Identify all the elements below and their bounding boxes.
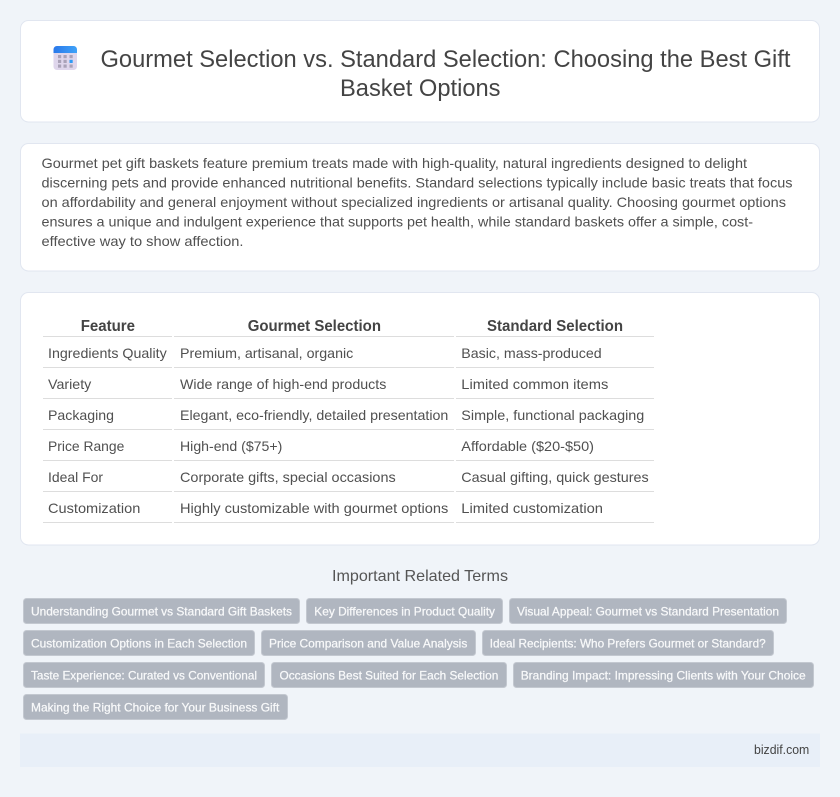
- table row: variety: Variety: [48, 376, 91, 392]
- table row: price range: Price Range: [48, 438, 125, 454]
- tag: ideal recipients: Ideal Recipients: Who Prefers Gourmet or Standard?: [490, 636, 766, 650]
- tag: key differences: [306, 598, 502, 624]
- tag: branding impact: [514, 662, 814, 688]
- table row: ideal for: Casual gifting, quick gestures: [461, 469, 649, 485]
- icon: calendar: [54, 46, 77, 70]
- table row: packaging: Elegant, eco-friendly, detailed presentation: [180, 407, 448, 423]
- table header row: [43, 318, 654, 337]
- table row: customization: Limited customization: [461, 500, 603, 516]
- table header row: Feature: [81, 318, 135, 335]
- table header row: Standard Selection: [487, 318, 623, 335]
- table row: price range: Affordable ($20-$50): [461, 438, 594, 454]
- tag: price comparison: [262, 630, 476, 656]
- table row: price range: [43, 438, 654, 461]
- text block: description: Gourmet pet gift baskets feature premium treats made with high-quality, natural ingredients designed to delight: [42, 155, 747, 171]
- table row: price range: High-end ($75+): [180, 438, 282, 454]
- table row: packaging: Packaging: [48, 407, 114, 423]
- tag: customization options: [24, 630, 254, 656]
- table row: customization: Highly customizable with gourmet options: [180, 500, 448, 516]
- tag: customization options: Customization Options in Each Selection: [31, 636, 247, 650]
- tag: key differences: Key Differences in Product Quality: [314, 604, 495, 618]
- table row: customization: [43, 500, 654, 523]
- table row: packaging: Simple, functional packaging: [461, 407, 644, 423]
- title: [100, 46, 791, 102]
- table row: ingredients quality: Basic, mass-produced: [461, 345, 602, 361]
- tag: visual appeal: Visual Appeal: Gourmet vs Standard Presentation: [517, 604, 779, 618]
- table row: ingredients quality: Premium, artisanal, organic: [180, 345, 353, 361]
- tag: making the right choice: Making the Right Choice for Your Business Gift: [31, 700, 280, 714]
- table header row: Gourmet Selection: [248, 318, 381, 335]
- tag: understanding: Understanding Gourmet vs Standard Gift Baskets: [31, 604, 292, 618]
- tag: occasions: [272, 662, 506, 688]
- table row: ingredients quality: [43, 345, 654, 368]
- table row: packaging: [43, 407, 654, 430]
- panel: description: [20, 144, 820, 271]
- table row: ideal for: [43, 469, 654, 492]
- tag: branding impact: Branding Impact: Impressing Clients with Your Choice: [521, 668, 806, 682]
- text block: description: effective way to show affection.: [42, 233, 244, 249]
- text block: description: on affordability and general enjoyment without specialized ingredients or artisanal quality. Choosing gourmet options: [42, 194, 786, 210]
- tag: price comparison: Price Comparison and Value Analysis: [269, 636, 467, 650]
- panel: comparison table: [20, 292, 820, 545]
- title: Gourmet Selection vs. Standard Selection: Choosing the Best Gift: [100, 46, 791, 73]
- panel: header: [20, 20, 820, 122]
- tag: taste experience: Taste Experience: Curated vs Conventional: [31, 668, 257, 682]
- table row: customization: Customization: [48, 500, 140, 516]
- table row: variety: Limited common items: [461, 376, 608, 392]
- table row: ideal for: Ideal For: [48, 469, 103, 485]
- tag: occasions: Occasions Best Suited for Each Selection: [280, 668, 498, 682]
- footer source text: bizdif.com: [754, 742, 809, 757]
- tag: ideal recipients: [482, 630, 774, 656]
- footer bar: [20, 734, 820, 767]
- table row: variety: [43, 376, 654, 399]
- text block: description: discerning pets and provide enhanced nutritional benefits. Standard selections typically include basic treats that focus: [42, 174, 792, 190]
- table row: ideal for: Corporate gifts, special occasions: [180, 469, 396, 485]
- tag: taste experience: [24, 662, 264, 688]
- table row: variety: Wide range of high-end products: [180, 376, 386, 392]
- tag: making the right choice: [24, 694, 288, 720]
- text block: description: ensures a unique and indulgent experience that supports pet health, while standard baskets offer a simple, cost-: [42, 214, 753, 230]
- title: Basket Options: [340, 75, 500, 102]
- heading: important related terms: Important Related Terms: [332, 568, 508, 585]
- text block: description: [42, 155, 792, 249]
- tag: visual appeal: [510, 598, 786, 624]
- table row: ingredients quality: Ingredients Quality: [48, 345, 167, 361]
- tag: understanding: [24, 598, 300, 624]
- tag list: [24, 598, 814, 720]
